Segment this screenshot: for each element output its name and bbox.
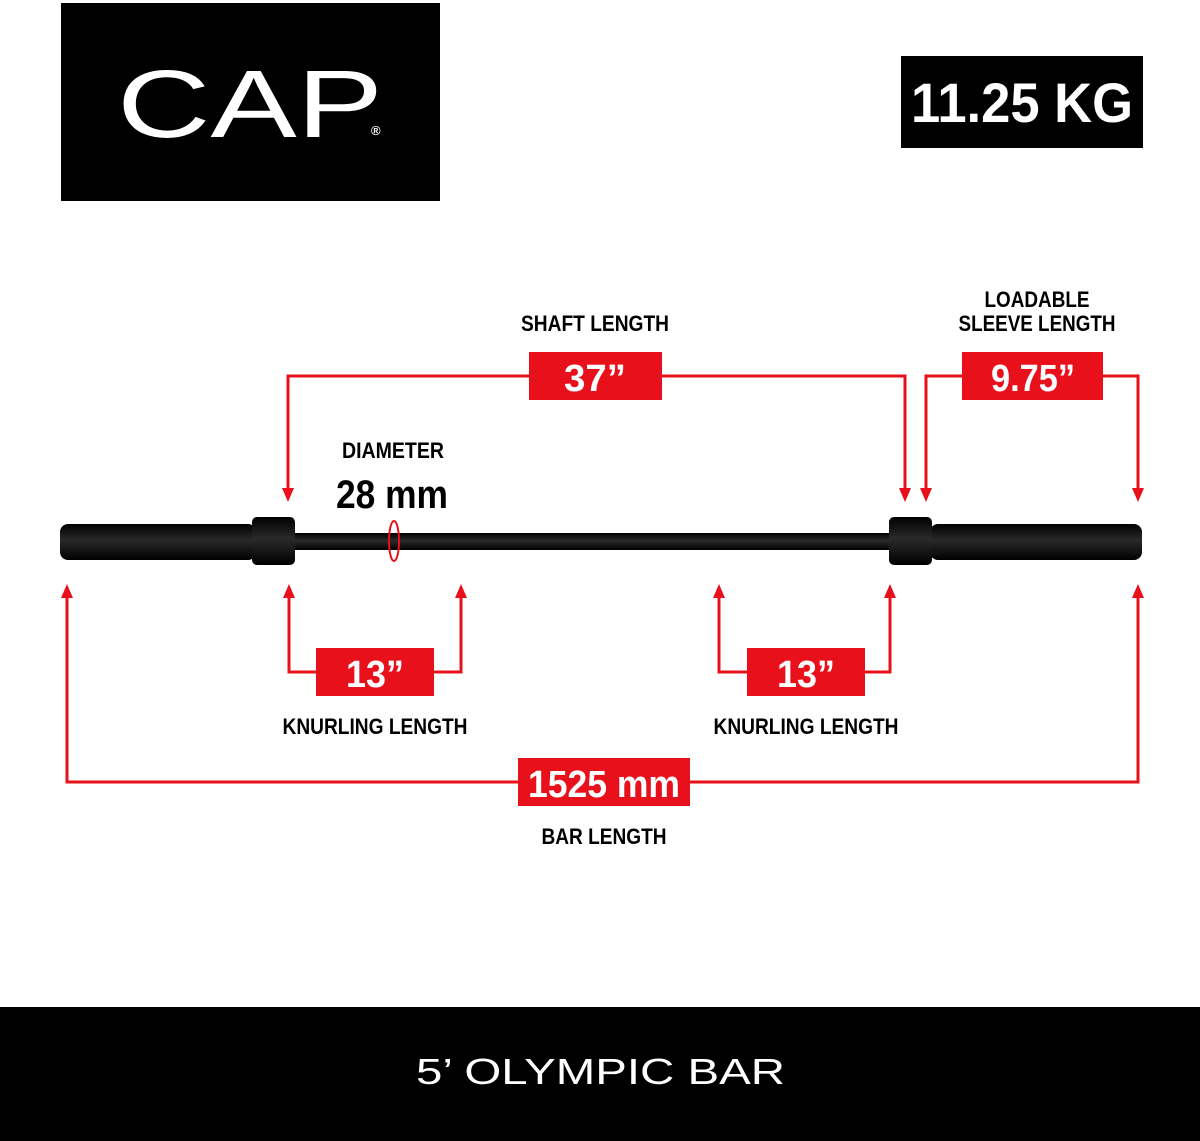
bar length dimension: 1525 mm <box>528 764 680 806</box>
weight label: 11.25 KG <box>911 71 1133 134</box>
sleeve length dimension <box>920 287 1144 502</box>
knurling length right: KNURLING LENGTH <box>714 714 898 739</box>
shaft length dimension: SHAFT LENGTH <box>521 311 669 336</box>
footer banner: 5’ OLYMPIC BAR <box>416 1051 785 1092</box>
knurling length left: 13” <box>346 654 404 696</box>
sleeve length dimension: LOADABLE <box>984 287 1090 312</box>
weight label <box>901 56 1143 148</box>
bar length dimension: BAR LENGTH <box>542 824 666 849</box>
diameter label: DIAMETER <box>342 438 444 463</box>
logo box <box>61 3 440 201</box>
logo box: ® <box>371 123 381 138</box>
knurling length right: 13” <box>777 654 835 696</box>
bar length dimension <box>61 584 1144 849</box>
knurling length left <box>282 584 468 739</box>
shaft length dimension <box>282 311 911 502</box>
knurling length left: KNURLING LENGTH <box>282 714 468 739</box>
sleeve length dimension: 9.75” <box>991 358 1075 400</box>
logo box: CAP <box>117 51 383 158</box>
footer banner <box>0 1007 1200 1141</box>
shaft length dimension: 37” <box>564 358 626 400</box>
sleeve length dimension: SLEEVE LENGTH <box>958 311 1116 336</box>
diameter label: 28 mm <box>336 473 448 517</box>
barbell <box>60 517 1142 565</box>
diameter label <box>336 438 448 561</box>
knurling length right <box>713 584 898 739</box>
